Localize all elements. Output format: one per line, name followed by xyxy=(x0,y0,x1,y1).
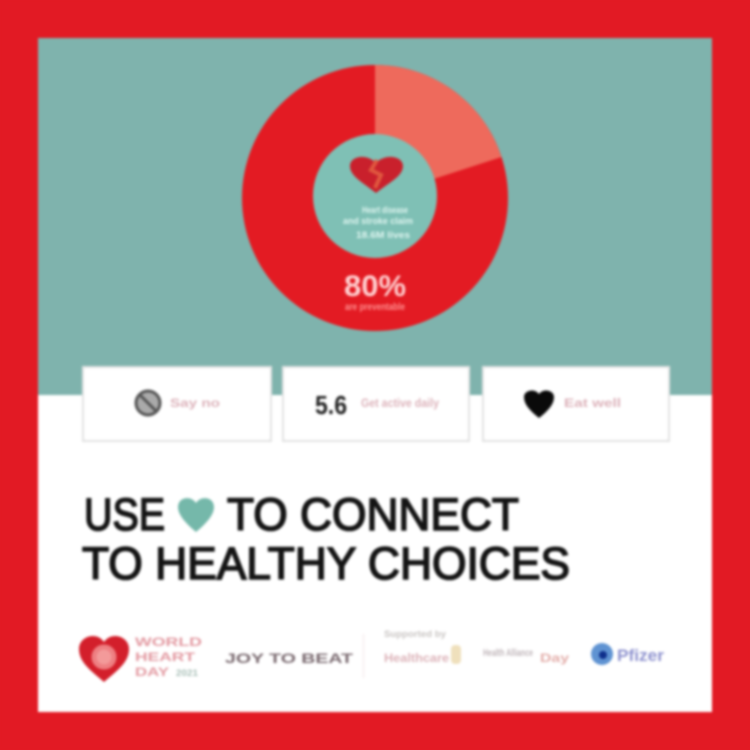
icon: teal heart xyxy=(178,498,214,532)
icon: heart xyxy=(524,390,554,418)
teal upper panel xyxy=(38,38,712,395)
centre caption: Heart disease xyxy=(362,205,408,215)
statistic caption: are preventable xyxy=(345,302,405,313)
donut chart xyxy=(242,65,508,331)
heading line 1, right: TO CONNECT xyxy=(227,489,519,540)
heading line 2: TO HEALTHY CHOICES xyxy=(82,538,570,589)
logo wordmark: 2021 xyxy=(176,668,198,678)
Pfizer mark centre xyxy=(599,651,607,659)
heart crack xyxy=(371,160,381,188)
heading line 1, left: USE xyxy=(84,489,165,540)
card: eat well xyxy=(483,367,669,441)
donut centre xyxy=(313,134,437,258)
card: get active xyxy=(283,367,469,441)
sponsor: partner logo xyxy=(483,648,569,665)
partner name: Health Alliance xyxy=(483,648,533,659)
heading xyxy=(82,489,570,589)
donut segment: 80 percent xyxy=(242,65,508,331)
statistic: 80%: 80% xyxy=(344,270,406,303)
card: say no xyxy=(83,367,271,441)
icon: broken heart xyxy=(350,157,403,193)
supporter name: Healthcare xyxy=(384,651,449,665)
centre caption: 18.6M lives xyxy=(356,230,410,240)
card label: Eat well xyxy=(564,396,621,410)
logo wordmark: WORLD xyxy=(135,635,202,649)
sponsor: Pfizer xyxy=(591,643,664,665)
card label: Say no xyxy=(170,396,220,410)
logo heart ring xyxy=(94,647,114,667)
partner accent: Day xyxy=(540,651,569,665)
sponsor: dark wordmark: JOY TO BEAT xyxy=(225,650,354,666)
centre caption: and stroke claim xyxy=(343,216,413,226)
centre caption xyxy=(343,205,413,240)
sponsor: supported by xyxy=(384,629,461,665)
Pfizer wordmark: Pfizer xyxy=(617,646,664,665)
supporter mark xyxy=(451,645,461,664)
divider xyxy=(363,634,364,678)
icon: activity figure: 5.6 xyxy=(315,390,347,420)
logo wordmark: DAY xyxy=(135,665,169,679)
icon: no smoking xyxy=(136,391,160,415)
card label: Get active daily xyxy=(361,396,439,410)
card background xyxy=(83,367,271,441)
logo wordmark xyxy=(135,635,202,679)
card background xyxy=(283,367,469,441)
logo: World Heart Day xyxy=(79,635,202,682)
donut segment: 20 percent xyxy=(375,65,502,198)
logo wordmark: HEART xyxy=(135,650,196,664)
card background xyxy=(483,367,669,441)
logo heart xyxy=(79,636,129,682)
Pfizer mark xyxy=(591,643,613,665)
supporter caption: Supported by xyxy=(384,629,446,639)
heart shape xyxy=(350,157,403,193)
